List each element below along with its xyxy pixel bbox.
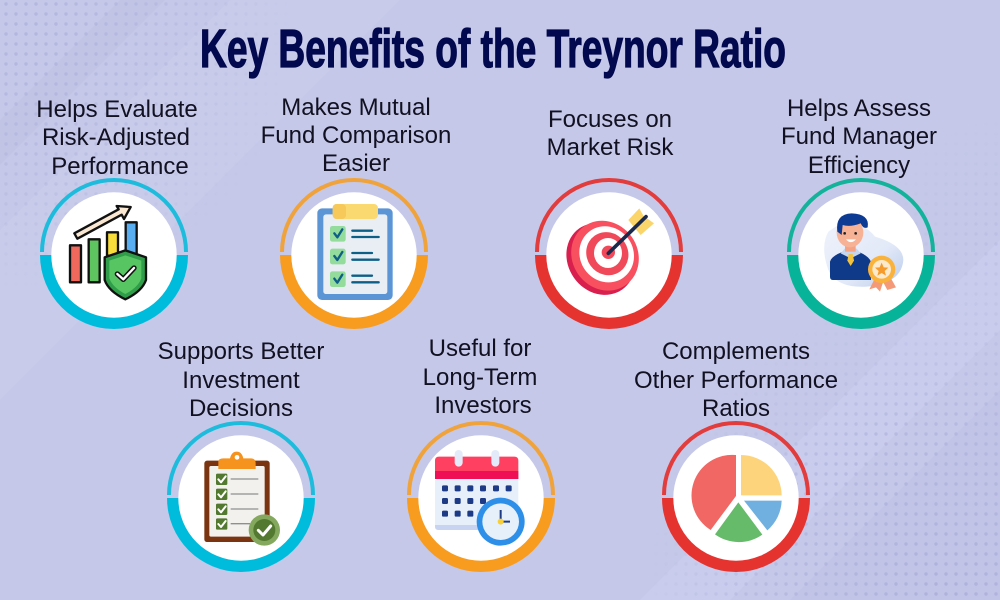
benefit 3 heading: Market Risk <box>547 134 674 161</box>
benefit 6 heading: Useful for <box>429 335 531 362</box>
benefit 1 heading <box>36 96 198 180</box>
icon: bar chart with shield <box>70 206 146 299</box>
benefit 4 heading: Helps Assess <box>787 95 931 122</box>
benefit 5 ring <box>167 423 315 572</box>
benefit 6 heading <box>423 335 537 419</box>
benefit 5 heading <box>158 338 324 422</box>
icon: fund manager with medal <box>824 213 903 292</box>
benefit 7 heading: Other Performance <box>634 367 838 394</box>
benefit 3 heading: Focuses on <box>548 106 672 133</box>
benefit 7 heading: Complements <box>662 338 810 365</box>
benefit 4 heading <box>781 95 937 179</box>
icon: clipboard checklist <box>317 204 393 300</box>
benefit 3 heading <box>547 106 674 161</box>
benefit 1 heading: Risk-Adjusted <box>42 124 190 151</box>
benefit 2 ring <box>280 180 428 329</box>
benefit 1 ring <box>40 180 188 329</box>
benefit 2 heading <box>261 94 451 177</box>
icon: checklist with badge <box>204 452 280 546</box>
benefit 5 heading: Decisions <box>189 395 293 422</box>
benefit 7 ring <box>662 423 810 572</box>
benefit 4 ring <box>787 180 935 329</box>
benefit 4 heading: Efficiency <box>808 152 910 179</box>
icon: target and arrow <box>552 207 654 308</box>
benefit 3 ring <box>535 180 683 329</box>
benefit 7 heading: Ratios <box>702 395 770 422</box>
benefit 5 heading: Supports Better <box>158 338 324 365</box>
benefit 4 heading: Fund Manager <box>781 123 937 150</box>
benefit 6 ring <box>407 423 555 572</box>
icon: pie chart <box>692 455 782 542</box>
benefit 2 heading: Easier <box>322 150 390 177</box>
benefit 6 heading: Long-Term <box>423 364 537 391</box>
icon: calendar with clock <box>435 450 525 546</box>
benefit 2 heading: Makes Mutual <box>281 94 431 121</box>
benefit 1 heading: Helps Evaluate <box>36 96 198 123</box>
benefit 5 heading: Investment <box>182 367 300 394</box>
benefit 1 heading: Performance <box>51 153 189 180</box>
benefit 6 heading: Investors <box>434 392 532 419</box>
benefit 2 heading: Fund Comparison <box>261 122 451 149</box>
benefit 7 heading <box>634 338 838 422</box>
